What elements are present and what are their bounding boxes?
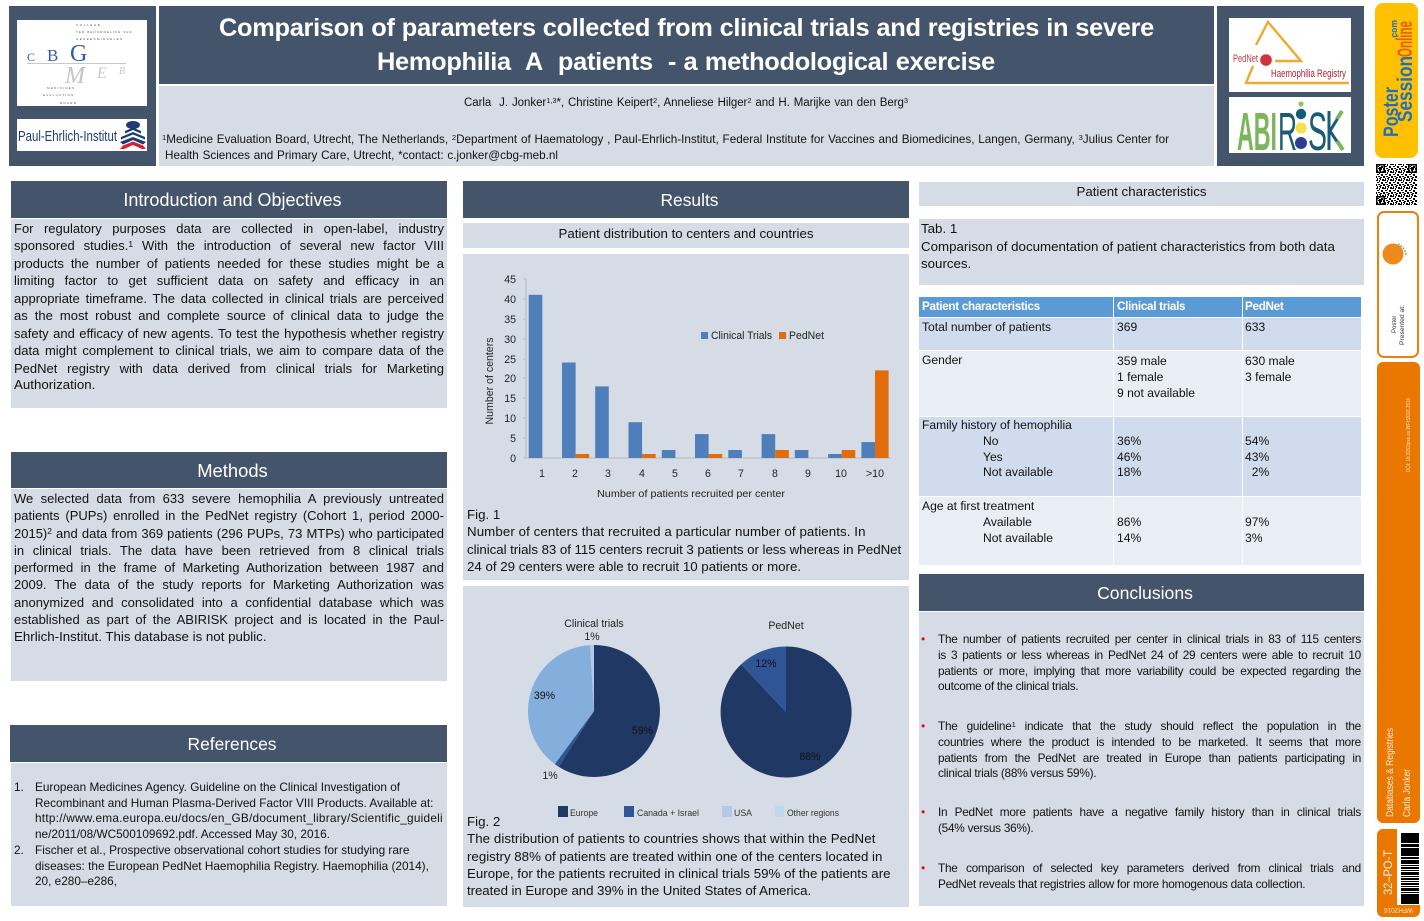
bar chart: centers by patients recruited: Clinical Trials [711,330,772,342]
row: gender: Gender [922,353,962,367]
caption: figure 2: The distribution of patients to countries shows that within the PedNet [467,831,875,846]
conclusion 3: • [921,805,925,819]
row: age at first treatment: 3% [1245,531,1262,545]
sidebar: PosterSessionOnline badge: .com [1389,20,1399,40]
panel: introduction text: safety and efficacy of new agents. To test the hypothesis whether registry [14,326,444,341]
pie chart: PedNet: PedNet [768,620,804,632]
logo: CBG-MEB: C [27,50,35,64]
row: age at first treatment: Available [983,515,1032,529]
heading: patient characteristics: Patient characteristics [1076,184,1207,199]
conclusion 2 [921,719,1361,780]
panel: references list: http://www.ema.europa.eu/docs/en_GB/document_library/Scientific_guideli [35,811,443,825]
panel: references list: European Medicines Agency. Guideline on the Clinical Investigation of [35,780,400,794]
row: family history: Yes [983,450,1003,464]
logo: CBG-MEB [17,20,147,106]
logo: CBG-MEB: G [70,41,87,67]
conclusion 4: PedNet reveals that registries allow for more homogenous data collection. [938,877,1305,891]
panel: methods text: established as part of the ABIRISK project and is located in the Paul- [14,612,444,627]
panel: references list: 1. [14,780,24,794]
panel: table caption: Comparison of documentation of patient characteristics from both data [921,238,1335,254]
bar chart: centers by patients recruited: 0 [510,453,516,465]
panel: conclusions text [919,612,1364,906]
conclusion 2: patients from the PedNet are treated in Europe than patients participating in [938,750,1361,764]
table header: Clinical trials [1117,300,1185,313]
sidebar: session strip [1377,362,1420,823]
panel: introduction text: Authorization. [14,377,95,392]
panel: introduction text: For regulatory purposes data are collected in open-label, industry [14,221,444,236]
bar chart: centers by patients recruited: 6 [705,468,711,480]
pie chart: clinical trials: Clinical trials [564,618,624,630]
panel: references list: 2. [14,843,24,857]
bar chart: centers by patients recruited: 35 [504,314,516,326]
caption: figure 2: Fig. 2 [467,814,500,829]
panel: authors and affiliations [159,86,1214,166]
sidebar: PosterSessionOnline badge [1375,3,1418,158]
row: family history: 54% [1245,434,1269,448]
logo: CBG-MEB: BOARD [60,101,77,105]
caption: figure 1: clinical trials 83 of 115 centers recruit 3 patients or less whereas in PedNet [467,542,901,557]
sidebar: PosterSessionOnline badge: Session [1394,56,1417,122]
panel: references list [11,763,447,906]
heading: patient distribution [463,223,909,248]
panel: methods text: patients (PUPs) enrolled in the PedNet registry (Cohort 1, period 2000- [14,508,444,523]
bar chart: centers by patients recruited: 7 [738,468,744,480]
sidebar: presented at box: Poster [1392,316,1398,333]
panel: methods text: performed in the frame of Marketing Authorization between 1987 and [14,560,444,575]
bar chart: centers by patients recruited: 20 [504,373,516,385]
title: Hemophilia A patients - a methodological exercise [377,48,995,76]
caption: figure 2: registry 88% of patients are treated within one of the centers located in [467,849,882,864]
title [159,6,1214,84]
conclusion 1: patients or more, implying that more variability could be expected regarding the [938,664,1361,678]
panel: introduction text: PedNet registry with data derived from clinical trials for Marketing [14,361,444,376]
sidebar: QR code [1376,164,1417,205]
sidebar: poster number and barcode [1377,829,1420,917]
panel: methods text: in clinical trials. The data have been retrieved from 8 clinical trials [14,543,444,558]
pie chart: PedNet: 88% [799,751,821,763]
panel: methods text [11,489,447,681]
panel: introduction text: as the most robust and complete source of clinical data to judge the [14,308,444,323]
caption: figure 1: Fig. 1 [467,507,500,522]
conclusion 1: outcome of the clinical trials. [938,679,1078,693]
row: total number of patients: 369 [1117,320,1137,334]
bar chart: centers by patients recruited: 4 [639,468,645,480]
row: gender: 630 male [1245,354,1295,368]
pie chart: clinical trials: 39% [534,690,556,702]
panel: references list: Fischer et al., Prospective observational cohort studies for studying rare [35,843,409,857]
panel: introduction text: limiting factor to get sufficient data on safety and efficacy in an [14,273,444,288]
conclusion 1: is 3 patients or less whereas in PedNet 24 of 29 centers were able to recruit 10 [938,648,1361,662]
pie chart: clinical trials [528,618,660,782]
conclusion 3 [921,805,1361,835]
panel: references list: Recombinant and Human Plasma-Derived Factor VIII Products. Available at: [35,796,433,810]
conclusion 2: The guideline1 indicate that the study should reflect the population in the [938,719,1361,733]
bar chart: centers by patients recruited: 30 [504,334,516,346]
row: family history: 2% [1252,465,1269,479]
caption: figure 1 [467,507,902,574]
bar chart: centers by patients recruited: 45 [504,274,516,286]
row: gender: 3 female [1245,370,1291,384]
logo: CBG-MEB: B [119,66,125,77]
row: family history [919,417,1361,496]
title: Comparison of parameters collected from clinical trials and registries in severe [219,14,1154,42]
bar chart: centers by patients recruited: 15 [504,393,516,405]
panel: introduction text [11,219,447,408]
authors: Carla J. Jonker1,3*, Christine Keipert2, Anneliese Hilger2 and H. Marijke van den Berg3 [464,96,908,109]
panel: table caption: sources. [921,256,971,271]
bar chart: centers by patients recruited: PedNet [789,330,824,342]
conclusion 3: In PedNet more patients have a negative family history than in clinical trials [938,805,1361,819]
logo: CBG-MEB: E [96,65,107,82]
panel: methods text: 2015)2 and data from 369 patients (296 PUPs, 73 MTPs) who participated [14,526,444,541]
sidebar: PosterSessionOnline badge: Poster [1380,87,1403,137]
panel: results heading [463,181,909,218]
panel: figure 1 [463,254,909,580]
conclusion 2: clinical trials (88% versus 59%). [938,766,1096,780]
conclusion 1: The number of patients recruited per center in clinical trials in 83 of 115 centers [938,632,1361,646]
conclusion 4 [921,861,1361,891]
logo: CBG-MEB: COLLEGE [76,23,101,27]
logo: ABIRISK [1229,97,1351,153]
panel: references heading: References [188,734,276,754]
sidebar: session strip: Databases & Registries [1385,728,1396,817]
conclusion 2: countries where the product is intended to be marketed. It seems that more [938,735,1361,749]
bar chart: centers by patients recruited: 5 [672,468,678,480]
pie legend: Other regions [787,808,839,818]
bar chart: centers by patients recruited [484,274,891,500]
panel: methods heading [11,452,447,488]
logo: CBG-MEB: MEDICINES [47,86,75,90]
table header [919,297,1361,317]
pie legend: USA [734,808,752,818]
bar chart: centers by patients recruited: Number of centers [484,338,496,424]
logo: Paul-Ehrlich-Institut [17,119,147,151]
row: age at first treatment: 86% [1117,515,1141,529]
panel: results heading: Results [660,190,718,210]
bar chart: centers by patients recruited: 10 [835,468,847,480]
row: total number of patients [919,318,1361,350]
pie chart: clinical trials: 1% [584,631,600,643]
row: age at first treatment: 97% [1245,515,1269,529]
bar chart: centers by patients recruited: 40 [504,294,516,306]
logo: CBG-MEB: M [64,63,87,89]
affiliations: 1Medicine Evaluation Board, Utrecht, The Netherlands, 2Department of Haematology , Paul-Ehrlich-Institut, Federal Institute for Vaccines and Biomedicines, Langen, Germany, 3Julius Center for [162,133,1169,146]
logo: PedNet Haemophilia Registry [1229,18,1351,92]
row: age at first treatment: Age at first treatment [922,499,1034,513]
bar chart: centers by patients recruited: 2 [572,468,578,480]
table column rules [1113,297,1114,565]
row: family history: 43% [1245,450,1269,464]
table header: Patient characteristics [922,300,1040,313]
panel: figure 2 [463,586,909,907]
panel: introduction heading [11,181,447,218]
row: age at first treatment: Not available [983,531,1053,545]
row: age at first treatment [919,497,1361,565]
panel: introduction text: sponsored studies.1 With the introduction of several new factor VIII [14,238,444,253]
heading: patient characteristics [919,182,1364,206]
bar chart: centers by patients recruited: 8 [772,468,778,480]
conclusion 4: The comparison of selected key parameters derived from clinical trials and [938,861,1361,875]
table header: PedNet [1245,300,1283,313]
row: gender: 9 not available [1117,386,1195,400]
sidebar: session strip: Carla Jonker [1402,768,1413,817]
caption: figure 2: Europe, for the patients recruited in clinical trials 59% of the patients are [467,866,891,881]
panel: methods text: Ehrlich-Institut. This database is not public. [14,629,267,644]
row: gender: 1 female [1117,370,1163,384]
panel: introduction text: products the number of patients needed for these studies might be a [14,256,444,271]
conclusion 3: (54% versus 36%). [938,821,1033,835]
conclusion 1 [921,632,1361,693]
row: total number of patients: Total number of patients [922,320,1051,334]
panel: methods text: 2009. The data of the study reports for Marketing Authorization was [14,577,444,592]
bar chart: centers by patients recruited: 3 [605,468,611,480]
row: age at first treatment: 14% [1117,531,1141,545]
caption: figure 1: Number of centers that recruited a particular number of patients. In [467,524,866,539]
conclusion 4: • [921,861,925,875]
row: gender [919,351,1361,416]
pie legend: Europe [570,808,598,818]
panel: methods text: We selected data from 633 severe hemophilia A previously untreated [14,491,444,506]
panel: references list: 20, e280–e286, [35,874,117,888]
sidebar: presented at box [1377,211,1419,358]
row: family history: 46% [1117,450,1141,464]
heading: patient distribution: Patient distribution to centers and countries [558,226,814,241]
row: gender: 359 male [1117,354,1167,368]
logo: Paul-Ehrlich-Institut: Paul-Ehrlich-Institut [18,128,118,145]
bar chart: centers by patients recruited: >10 [866,468,884,480]
row: family history: Family history of hemophilia [922,418,1072,432]
bar chart: centers by patients recruited: 1 [539,468,545,480]
row: family history: 18% [1117,465,1141,479]
pie legend [558,806,839,818]
pie legend: Canada + Israel [637,808,699,818]
logo: CBG-MEB: GENEESMIDDELEN [76,37,124,41]
row: family history: Not available [983,465,1053,479]
panel: introduction text: appropriate timeframe. The data collected in clinical trials are perceived [14,291,444,306]
sidebar: presented at box: Presented at: [1400,305,1406,345]
logo: CBG-MEB: B [47,46,58,65]
sidebar: poster number and barcode: 32–PO-T [1381,849,1395,895]
sidebar: poster number and barcode: WFH2016 [1384,906,1413,913]
bar chart: centers by patients recruited: 10 [504,413,516,425]
panel: references list: diseases: the European PedNet Haemophilia Registry. Haemophilia (2014), [35,859,429,873]
row: family history: No [983,434,998,448]
panel: methods heading: Methods [197,460,268,481]
caption: figure 2 [467,814,891,898]
conclusion 2: • [921,719,925,733]
panel: introduction heading: Introduction and Objectives [123,190,342,210]
logo: PedNet Haemophilia Registry: PedNet [1233,53,1258,65]
panel: references heading [10,725,447,762]
caption: figure 2: treated in Europe and 39% in the United States of America. [467,883,811,898]
panel: table caption: Tab. 1 [921,221,957,236]
sidebar: session strip: DOI: 10.3252/pso.eu.WFH2016.2016 [1406,398,1412,472]
panel: right logo box [1217,6,1364,166]
logo: CBG-MEB: TER BEOORDELING VAN [76,30,133,34]
table: patient characteristics [919,297,1361,565]
panel: methods text: anonymized and consolidated into a confidential database which was [14,595,444,610]
panel: conclusions heading [919,574,1364,611]
panel: authors and affiliations: Health Sciences and Primary Care, Utrecht, *contact: c.jonker@cbg-meb.nl [165,149,558,162]
bar chart: centers by patients recruited: 5 [510,433,516,445]
conclusion 1: • [921,632,925,646]
panel: conclusions heading: Conclusions [1097,583,1193,603]
pie chart: PedNet [720,620,852,778]
panel: introduction text: data might complement to clinical trials, we aim to compare data of the [14,343,444,358]
pie chart: clinical trials: 59% [632,725,654,737]
bar chart: centers by patients recruited: 9 [805,468,811,480]
row: total number of patients: 633 [1245,320,1265,334]
pie chart: clinical trials: 1% [542,770,558,782]
logo: CBG-MEB: EVALUATION [43,93,75,97]
panel: left logo box [9,6,156,166]
panel: references list: ne/2011/08/WC500109692.pdf. Accessed May 30, 2016. [35,827,330,841]
row: family history: 36% [1117,434,1141,448]
caption: figure 1: 24 of 29 centers were able to recruit 10 patients or more. [467,559,801,574]
bar chart: centers by patients recruited: 25 [504,354,516,366]
bar chart: centers by patients recruited: Number of patients recruited per center [597,489,786,500]
pie chart: PedNet: 12% [755,658,777,670]
panel: table caption [919,219,1364,285]
